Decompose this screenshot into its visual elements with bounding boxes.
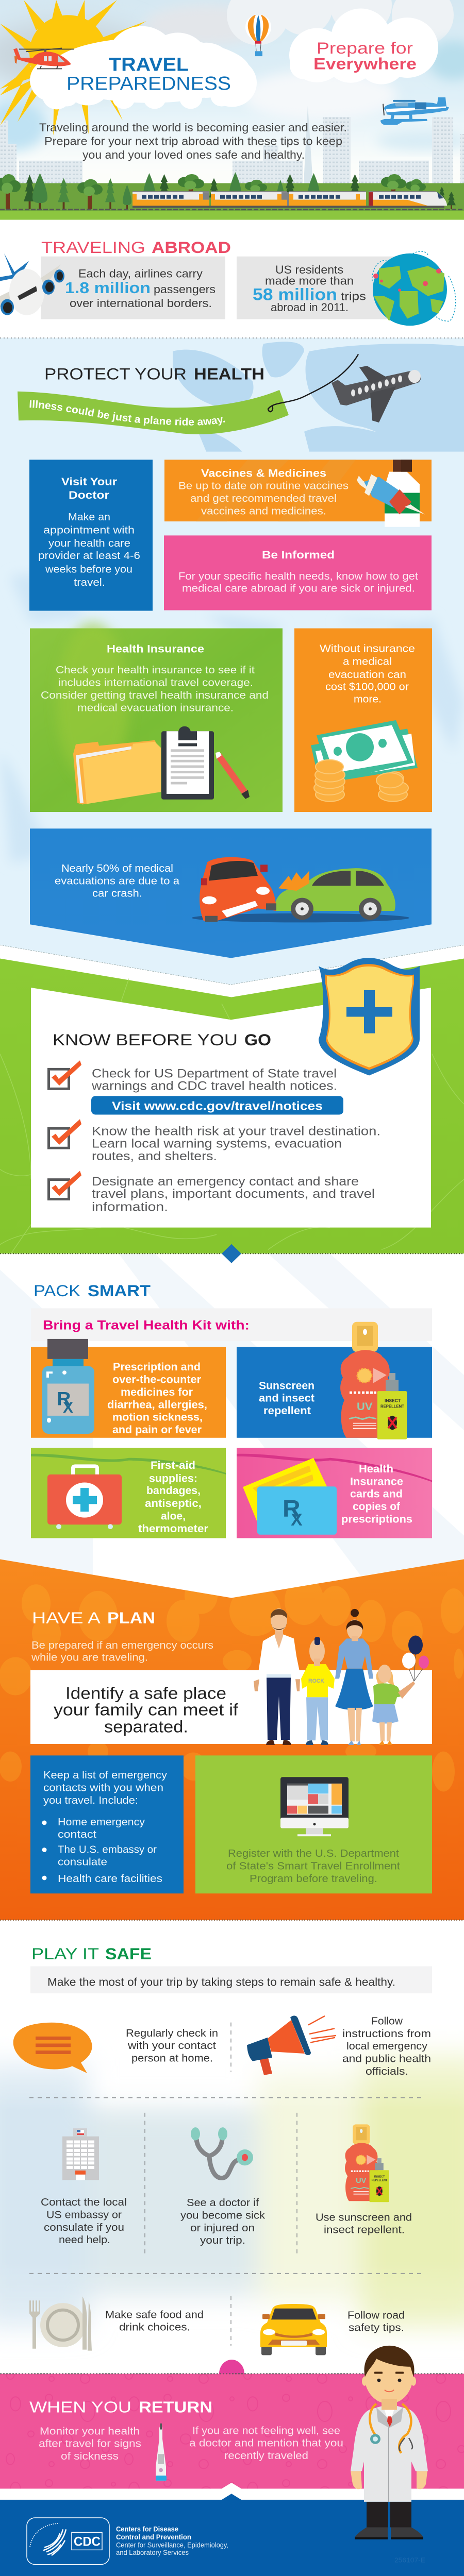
panel: smart traveler enrollment — [195, 1755, 432, 1893]
world map background — [173, 342, 464, 452]
card: first aid: thermometer — [138, 1523, 208, 1535]
card: first aid — [31, 1448, 226, 1538]
card: sunscreen and repellent — [237, 1322, 432, 1439]
tip: embassy: US embassy or — [46, 2209, 122, 2221]
man — [254, 1608, 301, 1745]
illustration: doctor — [351, 2346, 428, 2539]
cloud: title — [30, 26, 257, 109]
section: footer — [0, 2494, 464, 2576]
heading — [32, 1609, 155, 1627]
checklist item 1 — [48, 1060, 337, 1093]
cloud: tagline — [289, 9, 438, 84]
card: medicines: medicines for — [121, 1386, 193, 1398]
stat panel: trips: trips — [341, 290, 366, 302]
intro text: while you are traveling. — [31, 1651, 148, 1663]
text: monitor health: after travel for signs — [39, 2438, 141, 2450]
tagline: Everywhere — [313, 55, 417, 73]
panel: health insurance: Consider getting travel health insurance and — [41, 689, 269, 701]
tip: check in: person at home. — [131, 2053, 213, 2064]
tip: public health officials: local emergency — [346, 2040, 428, 2052]
card: sunscreen and repellent: and insect — [259, 1393, 314, 1404]
checklist item 2: Know the health risk at your travel destination. — [92, 1125, 380, 1138]
tip: embassy: Contact the local — [41, 2196, 127, 2208]
heading — [44, 365, 264, 383]
checklist item 2 — [48, 1119, 380, 1163]
card: first aid: supplies: — [149, 1473, 197, 1484]
train — [132, 191, 447, 208]
card: first aid: antiseptic, — [145, 1498, 202, 1510]
icon: prescription bottle: R — [57, 1388, 71, 1409]
link button — [91, 1096, 343, 1114]
section divider — [0, 1253, 464, 1254]
icon: sunscreen and repellent bottles — [345, 2124, 389, 2202]
stat panel: trips: US residents — [275, 263, 343, 276]
panel: emergency contacts: consulate — [58, 1856, 107, 1868]
icon: embassy building — [62, 2128, 99, 2180]
tip: check in: with your contact — [127, 2040, 216, 2052]
section: play it safe — [0, 1921, 464, 2374]
heading: TRAVELING — [41, 238, 145, 257]
tip: sunscreen: insect repellent. — [324, 2224, 405, 2236]
watercolor background — [0, 1921, 464, 2374]
leaf veins — [0, 978, 464, 1255]
card: insurance cards: prescriptions — [341, 1514, 412, 1525]
panel: car crash: Nearly 50% of medical — [61, 862, 173, 874]
banner: Illness could be just a plane ride away. — [29, 400, 225, 426]
logo: HHS and CDC: CDC — [74, 2535, 101, 2549]
agency text: Center for Surveillance, Epidemiology, — [116, 2541, 228, 2549]
section: protect your health — [0, 337, 464, 985]
card: medicines: Prescription and — [113, 1361, 201, 1373]
tip: see a doctor: your trip. — [200, 2234, 245, 2246]
callout: safe place: Identify a safe place — [65, 1684, 226, 1702]
panel: visit your doctor — [29, 460, 153, 611]
panel: visit your doctor: provider at least 4-6 — [38, 550, 140, 562]
logo: HHS and CDC — [27, 2518, 109, 2565]
heading: PLAY IT — [31, 1944, 99, 1963]
heading: ABROAD — [152, 238, 231, 257]
icon: globe — [372, 251, 456, 326]
icon: stethoscope — [191, 2127, 253, 2178]
panel: vaccines and medicines: and get recommended travel — [190, 493, 337, 504]
tip: road safety — [260, 2304, 405, 2355]
heading: PLAN — [107, 1609, 155, 1627]
icon: insurance card: X — [291, 1511, 303, 1530]
panel: medical evacuation cost: cost $100,000 or — [325, 681, 409, 692]
panel: smart traveler enrollment: Program before traveling. — [250, 1873, 377, 1885]
stat panel: trips — [237, 257, 412, 319]
icon: computer monitor — [280, 1777, 349, 1836]
icon: speech bubble — [13, 2023, 92, 2073]
tip: safe food: Make safe food and — [105, 2309, 204, 2320]
tip: road safety: safety tips. — [349, 2322, 404, 2334]
card: first aid: aloe, — [161, 1511, 186, 1522]
tip: embassy: consulate if you — [44, 2222, 124, 2233]
checklist item 2: Learn local warning systems, evacuation — [92, 1137, 342, 1151]
card: insurance cards: Health — [359, 1463, 393, 1475]
panel: vaccines and medicines: vaccines and medicines. — [201, 505, 326, 517]
icon: helicopter — [13, 48, 74, 69]
stat panel: trips: made more than — [265, 274, 354, 287]
boy — [301, 1637, 335, 1745]
section: have a plan — [0, 1559, 464, 1920]
tip: embassy — [41, 2128, 127, 2246]
icon: prescription bottle — [42, 1339, 94, 1434]
section: know before you go — [0, 958, 464, 1255]
link button: Visit www.cdc.gov/travel/notices — [112, 1100, 323, 1113]
panel: health insurance — [30, 622, 283, 812]
tip: check in: Regularly check in — [126, 2027, 218, 2039]
heading: WHEN YOU — [29, 2399, 131, 2416]
title — [67, 54, 231, 94]
ground — [0, 183, 464, 220]
icon: sunscreen and repellent bottles: INSECT — [374, 2176, 385, 2178]
tagline — [313, 39, 417, 73]
stat panel: passengers: passengers — [154, 282, 216, 296]
heading: PACK — [34, 1281, 80, 1300]
icon: megaphone — [247, 2015, 336, 2075]
hero section — [0, 0, 464, 220]
panel: visit your doctor: travel. — [74, 577, 105, 588]
tip: sunscreen: Use sunscreen and — [316, 2212, 412, 2223]
card: insurance cards: Insurance — [350, 1476, 403, 1487]
bokeh lights — [0, 1577, 464, 1791]
icon: sunscreen and repellent bottles: UV — [356, 2177, 367, 2185]
heading: SAFE — [105, 1944, 152, 1963]
heading — [41, 238, 231, 257]
stat panel: passengers — [41, 257, 225, 319]
card: first aid: bandages, — [146, 1485, 201, 1497]
checklist item 2: routes, and shelters. — [92, 1149, 217, 1163]
text: see a doctor: recently traveled — [224, 2450, 308, 2462]
icon: pencil — [216, 752, 250, 799]
icon: sunscreen and repellent bottles — [340, 1322, 407, 1439]
tip: safe food: drink choices. — [119, 2321, 190, 2333]
agency text: Control and Prevention — [116, 2533, 191, 2541]
chevron outline — [0, 945, 464, 985]
panel: visit your doctor: Visit Your — [61, 475, 118, 488]
tip: check in — [13, 2023, 218, 2073]
card: medicines: over-the-counter — [112, 1374, 201, 1386]
heading: HAVE A — [32, 1609, 101, 1627]
panel: smart traveler enrollment: of State's Smart Travel Enrollment — [226, 1860, 400, 1872]
icon: grey airplane — [332, 366, 421, 422]
balloons — [402, 1636, 429, 1681]
sun — [0, 0, 146, 135]
text: monitor health — [39, 2426, 141, 2462]
text: see a doctor — [189, 2425, 343, 2462]
panel: medical evacuation cost: a medical — [343, 656, 392, 668]
tip: see a doctor — [180, 2127, 266, 2246]
white panel — [31, 988, 431, 1228]
icon: prescription bottle: X — [63, 1399, 73, 1416]
panel: vaccines and medicines: Be up to date on routine vaccines — [178, 480, 349, 492]
dashed dividers — [29, 2023, 422, 2346]
panel: health insurance: medical evacuation insurance. — [77, 702, 234, 714]
card: medicines: and pain or fever — [112, 1424, 202, 1436]
section: when you return — [0, 2360, 464, 2489]
intro text: you and your loved ones safe and healthy. — [82, 148, 305, 161]
title: TRAVEL — [109, 54, 189, 75]
checklist item 3: Designate an emergency contact and share — [92, 1175, 359, 1189]
section divider — [0, 1920, 464, 1921]
icon: crashed cars — [192, 857, 409, 922]
heading: RETURN — [139, 2399, 212, 2416]
section: traveling abroad — [0, 220, 464, 338]
icon: plate and cutlery — [29, 2296, 92, 2351]
panel: smart traveler enrollment: Register with the U.S. Department — [228, 1848, 399, 1859]
panel: medical evacuation cost: more. — [354, 693, 382, 705]
heading: GO — [244, 1030, 271, 1049]
panel: health insurance: Health Insurance — [107, 642, 204, 655]
stat panel: passengers: over international borders. — [70, 296, 212, 310]
intro panel: Make the most of your trip by taking steps to remain safe & healthy. — [47, 1975, 395, 1988]
callout: safe place — [30, 1670, 432, 1744]
tip: see a doctor: you become sick — [180, 2210, 266, 2221]
panel: car crash — [30, 828, 432, 958]
heading: PROTECT YOUR — [44, 365, 187, 383]
heading — [31, 1944, 152, 1963]
panel: visit your doctor: appointment with — [43, 524, 135, 536]
text: see a doctor: If you are not feeling well, see — [192, 2425, 340, 2436]
tip: see a doctor: See a doctor if — [187, 2197, 259, 2209]
tip: sunscreen — [316, 2124, 412, 2236]
illustration: family — [254, 1608, 429, 1745]
stat panel: trips: abroad in 2011. — [271, 300, 349, 314]
text: monitor health: of sickness — [61, 2450, 119, 2462]
panel: visit your doctor: Make an — [68, 511, 110, 523]
tip: embassy: need help. — [59, 2234, 110, 2246]
card: medicines: motion sickness, — [112, 1412, 203, 1423]
stat panel: passengers: 1.8 million — [65, 279, 151, 297]
panel: health insurance: includes international travel coverage. — [58, 677, 253, 689]
icon: yellow car — [260, 2304, 327, 2355]
trees — [0, 172, 456, 209]
checklist item 3: information. — [92, 1200, 168, 1214]
panel: emergency contacts: Home emergency — [58, 1816, 145, 1828]
kit heading panel: Bring a Travel Health Kit with: — [43, 1318, 250, 1332]
tip: road safety: Follow road — [347, 2310, 405, 2321]
icon: white airplane — [0, 253, 64, 315]
card: sunscreen and repellent: repellent — [263, 1405, 311, 1417]
icon: sunscreen and repellent bottles: REPELLENT — [380, 1403, 405, 1409]
icon: first aid kit — [47, 1464, 122, 1529]
icon: shield — [319, 958, 420, 1075]
icon: sunscreen and repellent bottles: UV — [357, 1400, 373, 1413]
tip: public health officials: instructions from — [342, 2028, 431, 2040]
icon: hot air balloon — [245, 15, 271, 56]
heading: SMART — [88, 1281, 151, 1300]
panel: be informed: For your specific health needs, know how to get — [178, 570, 418, 582]
intro text: Traveling around the world is becoming easier and easier. — [39, 121, 347, 134]
kit heading panel — [31, 1308, 432, 1341]
icon: insurance card — [243, 1458, 337, 1535]
panel: emergency contacts: The U.S. embassy or — [58, 1844, 157, 1855]
intro panel — [30, 1966, 432, 1993]
panel: car crash: car crash. — [92, 888, 142, 900]
panel: car crash: evacuations are due to a — [55, 875, 180, 887]
panel: visit your doctor: weeks before you — [45, 564, 132, 575]
agency text: Centers for Disease — [116, 2524, 178, 2533]
panel: visit your doctor: Doctor — [69, 489, 110, 501]
heading: HEALTH — [194, 365, 264, 383]
card: insurance cards: cards and — [350, 1488, 403, 1500]
girl — [372, 1665, 415, 1745]
tip: see a doctor: or injured on — [190, 2222, 255, 2234]
section divider — [0, 337, 464, 338]
banner — [18, 354, 359, 434]
stat panel: passengers: Each day, airlines carry — [78, 267, 203, 280]
panel: health insurance: Check your health insurance to see if it — [56, 664, 255, 676]
card: insurance cards: copies of — [353, 1501, 401, 1513]
checklist item 3: travel plans, important documents, and travel — [92, 1187, 375, 1201]
heading — [29, 2399, 212, 2416]
panel: medical evacuation cost: evacuation can — [328, 669, 406, 681]
heading — [34, 1281, 151, 1300]
icon: clipboard — [161, 726, 214, 800]
icon: seaplane — [380, 97, 449, 125]
panel: vaccines and medicines: Vaccines & Medicines — [201, 467, 326, 479]
stat panel: trips: 58 million — [253, 285, 337, 303]
card: sunscreen and repellent: Sunscreen — [259, 1380, 314, 1392]
checklist item 1: Check for US Department of State travel — [92, 1067, 337, 1080]
panel: emergency contacts: contact — [58, 1828, 96, 1840]
intro text — [39, 121, 347, 161]
agency text: and Laboratory Services — [116, 2548, 189, 2556]
icon: folder — [73, 740, 161, 804]
heading: KNOW BEFORE YOU — [53, 1030, 238, 1049]
icon: vial and syringe — [357, 460, 425, 527]
publication code: 256107-E — [394, 2556, 425, 2564]
tip: public health officials: Follow — [371, 2015, 403, 2027]
agency text — [116, 2524, 228, 2556]
callout: safe place: separated. — [104, 1718, 188, 1736]
checklist item 3 — [48, 1171, 375, 1214]
city skyline — [0, 106, 464, 183]
panel: emergency contacts: you travel. Include: — [43, 1794, 138, 1806]
section: pack smart — [0, 1244, 464, 1600]
intro text: Prepare for your next trip abroad with these tips to keep — [44, 134, 342, 147]
checklist item 1: warnings and CDC travel health notices. — [91, 1079, 337, 1093]
boy: ROCK — [308, 1678, 324, 1684]
panel: be informed: Be Informed — [262, 548, 335, 561]
intro text — [31, 1639, 213, 1663]
panel: visit your doctor: your health care — [48, 537, 130, 549]
text: see a doctor: a doctor and mention that you — [189, 2437, 343, 2449]
card: first aid: First-aid — [151, 1460, 195, 1471]
tip: public health officials: officials. — [366, 2065, 408, 2077]
icon: insurance card: R — [283, 1495, 301, 1522]
panel: be informed: medical care abroad if you are sick or injured. — [182, 583, 415, 594]
card: insurance cards — [237, 1448, 432, 1538]
callout: safe place: your family can meet if — [54, 1701, 239, 1719]
tip: safe food — [29, 2296, 204, 2351]
intro text: Be prepared if an emergency occurs — [31, 1639, 213, 1651]
tagline: Prepare for — [317, 39, 413, 57]
title: PREPAREDNESS — [67, 73, 231, 94]
icon: sunscreen and repellent bottles: INSECT — [385, 1398, 401, 1403]
woman — [335, 1609, 373, 1745]
tip: public health officials: and public health — [342, 2053, 431, 2064]
band: white separator — [0, 2483, 464, 2500]
tip: public health officials — [247, 2015, 431, 2077]
icon: sunscreen and repellent bottles: REPELLENT — [372, 2179, 388, 2182]
icon: cash and coins — [311, 720, 418, 802]
panel: be informed — [164, 535, 432, 610]
panel: emergency contacts: Keep a list of emergency — [43, 1769, 168, 1781]
diamond marker — [222, 1244, 241, 1263]
panel: vaccines and medicines — [164, 460, 432, 527]
panel: emergency contacts — [30, 1755, 184, 1893]
icon: thermometer — [156, 2424, 167, 2481]
card: medicines: diarrhea, allergies, — [107, 1399, 207, 1411]
panel: emergency contacts: contacts with you when — [43, 1782, 163, 1793]
card: medicines — [31, 1339, 226, 1438]
panel: medical evacuation cost — [294, 629, 432, 812]
panel: emergency contacts: Health care facilities — [58, 1873, 162, 1885]
panel: medical evacuation cost: Without insurance — [320, 643, 415, 654]
rail track — [0, 209, 464, 210]
text: monitor health: Monitor your health — [40, 2426, 140, 2437]
